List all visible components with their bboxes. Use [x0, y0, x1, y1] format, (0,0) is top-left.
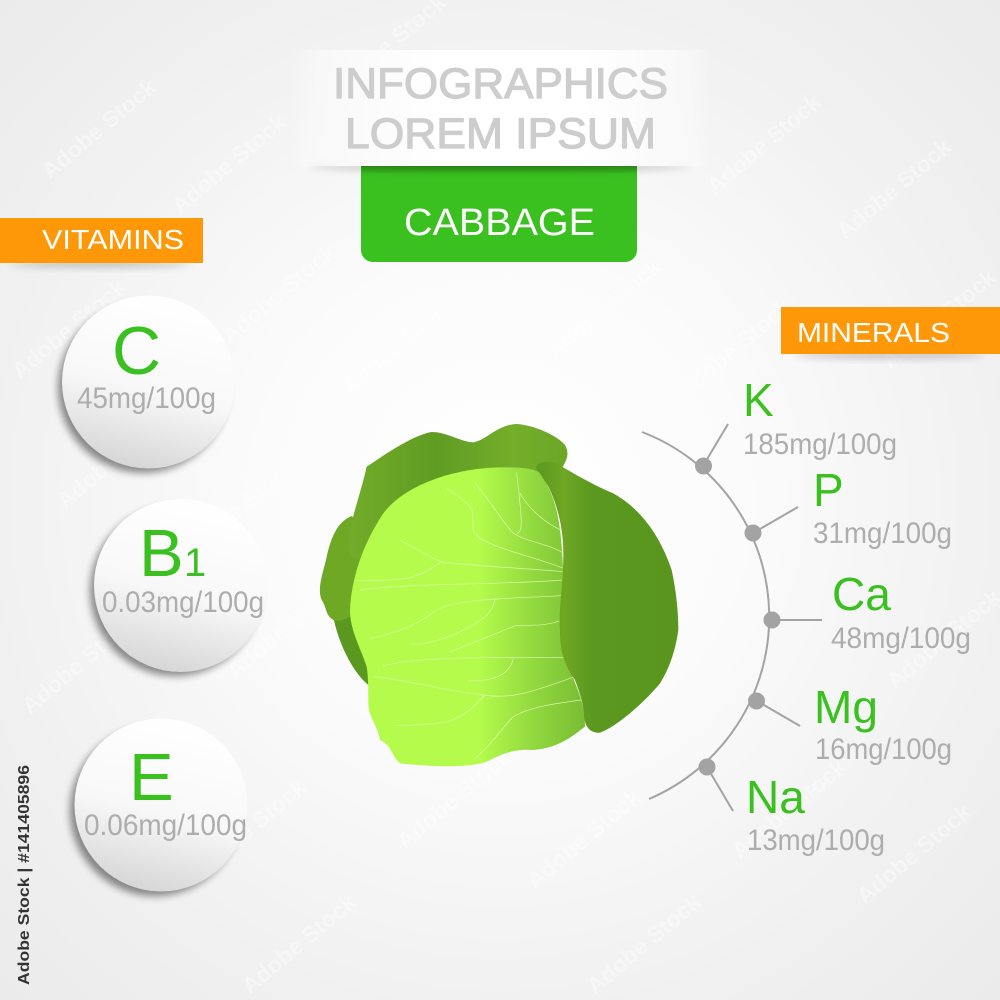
watermark pattern: Adobe Stock	[702, 88, 826, 199]
front right leaf	[536, 462, 678, 733]
stock credit: Adobe Stock | #141405896	[16, 765, 33, 985]
back leaf: top	[348, 424, 567, 559]
minerals label: MINERALS	[797, 317, 950, 348]
watermark pattern: Adobe Stock	[522, 783, 646, 894]
watermark pattern: Adobe Stock	[177, 453, 301, 564]
mineral Ca: Ca	[832, 568, 891, 620]
watermark pattern: Adobe Stock	[7, 273, 131, 384]
green tab: cabbage	[361, 166, 637, 262]
vitamins label: VITAMINS	[42, 224, 184, 255]
watermark pattern: Adobe Stock	[672, 293, 796, 404]
mineral K: K	[743, 374, 774, 426]
watermark pattern: Adobe Stock	[832, 133, 956, 244]
mineral Ca: 48mg/100g	[831, 622, 971, 655]
mineral P: P	[813, 464, 844, 516]
watermark pattern: Adobe Stock	[17, 608, 141, 719]
vitamin B1 badge: 0.03mg/100g	[102, 586, 264, 619]
leaf veins	[358, 473, 582, 758]
cabbage illustration	[320, 424, 678, 766]
mineral Mg: Mg	[814, 681, 878, 733]
vitamin E badge: E	[129, 740, 174, 815]
node K	[695, 458, 712, 474]
front leaf	[350, 467, 585, 766]
mineral Na: Na	[746, 771, 805, 823]
vitamin C badge	[58, 296, 235, 473]
watermark pattern: Adobe Stock	[187, 773, 311, 884]
mineral Mg: 16mg/100g	[815, 733, 952, 766]
watermark pattern: Adobe Stock	[542, 253, 666, 364]
back leaf: lower left	[333, 597, 400, 685]
title ribbon: INFOGRAPHICS	[333, 60, 668, 108]
vitamin E badge	[70, 718, 248, 896]
connector P	[753, 507, 798, 533]
watermark pattern: Adobe Stock	[222, 573, 346, 684]
watermark pattern: Adobe Stock	[237, 888, 361, 999]
title ribbon	[290, 50, 710, 171]
watermark pattern: Adobe Stock	[727, 753, 851, 864]
watermark pattern: Adobe Stock	[337, 288, 461, 399]
green tab: cabbage: CABBAGE	[404, 202, 595, 244]
mineral Na: 13mg/100g	[747, 824, 885, 857]
mineral Na	[746, 771, 885, 857]
node P	[744, 524, 762, 542]
mineral K	[743, 374, 897, 461]
watermark pattern: Adobe Stock	[507, 63, 631, 174]
watermark pattern: Adobe Stock	[52, 403, 176, 514]
vitamin B1 badge	[90, 499, 267, 676]
watermark pattern: Adobe Stock	[877, 263, 1000, 374]
vitamins label	[0, 218, 203, 267]
back leaf: left	[320, 516, 387, 621]
watermark pattern: Adobe Stock	[852, 798, 976, 909]
mineral P	[813, 464, 952, 550]
mineral Mg	[814, 681, 952, 766]
watermark pattern: Adobe Stock	[37, 73, 161, 184]
vitamin E badge: 0.06mg/100g	[84, 809, 247, 842]
watermark pattern: Adobe Stock	[582, 888, 706, 999]
vitamin B1 badge: 1	[184, 541, 206, 585]
node Mg	[748, 692, 765, 710]
vitamin B1 badge: B	[139, 516, 184, 591]
watermark pattern: Adobe Stock	[217, 238, 341, 349]
node Na	[698, 758, 716, 776]
connector K	[703, 424, 728, 466]
watermark pattern: Adobe Stock	[392, 743, 516, 854]
connector Mg	[757, 701, 800, 726]
node Ca	[764, 612, 780, 628]
mineral Ca	[831, 568, 971, 655]
connector Na	[707, 767, 733, 811]
vitamin C badge: 45mg/100g	[77, 382, 216, 415]
title ribbon: LOREM IPSUM	[345, 110, 656, 158]
minerals arc with connectors	[642, 424, 822, 811]
mineral P: 31mg/100g	[813, 517, 952, 550]
mineral K: 185mg/100g	[743, 428, 897, 461]
vitamin C badge: C	[112, 313, 161, 389]
watermark pattern: Adobe Stock	[167, 108, 291, 219]
connector Ca	[772, 619, 822, 621]
minerals label	[781, 307, 1000, 358]
watermark pattern: Adobe Stock	[372, 78, 496, 189]
